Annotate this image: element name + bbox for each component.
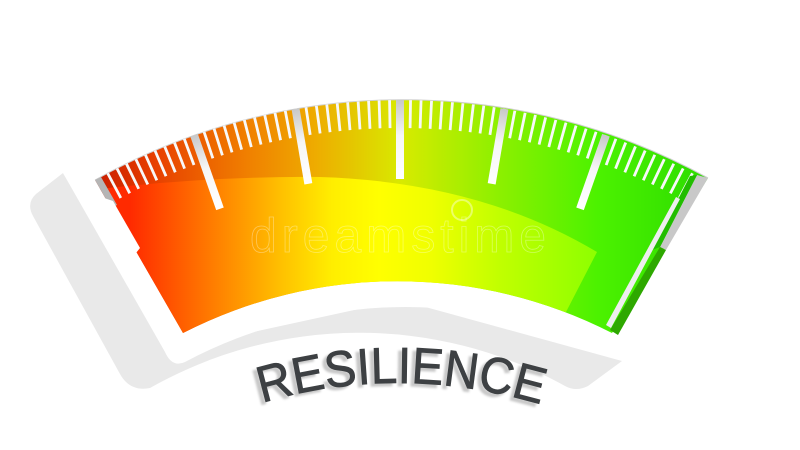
major tick marks bbox=[190, 100, 610, 210]
infographic: resilience gauge bbox=[30, 99, 708, 408]
outer darker colour band bbox=[95, 100, 708, 333]
minor tick marks bbox=[105, 114, 695, 190]
left end cap bbox=[95, 177, 140, 253]
grey indicator slot bbox=[660, 175, 708, 250]
white indicator line bbox=[606, 197, 680, 328]
green strip bbox=[652, 175, 697, 250]
drop shadow panel bbox=[30, 173, 622, 389]
top rim bbox=[95, 100, 708, 180]
white bezel bbox=[63, 96, 708, 364]
label: RESILIENCE: RESILIENCE bbox=[252, 348, 548, 408]
watermark: dreamstime bbox=[250, 210, 546, 263]
dark green indicator bar bbox=[610, 247, 666, 335]
inner brighter colour region bbox=[90, 177, 597, 340]
right end cap bbox=[606, 175, 708, 335]
gauge face bbox=[90, 100, 708, 340]
watermark logo bbox=[452, 200, 472, 220]
